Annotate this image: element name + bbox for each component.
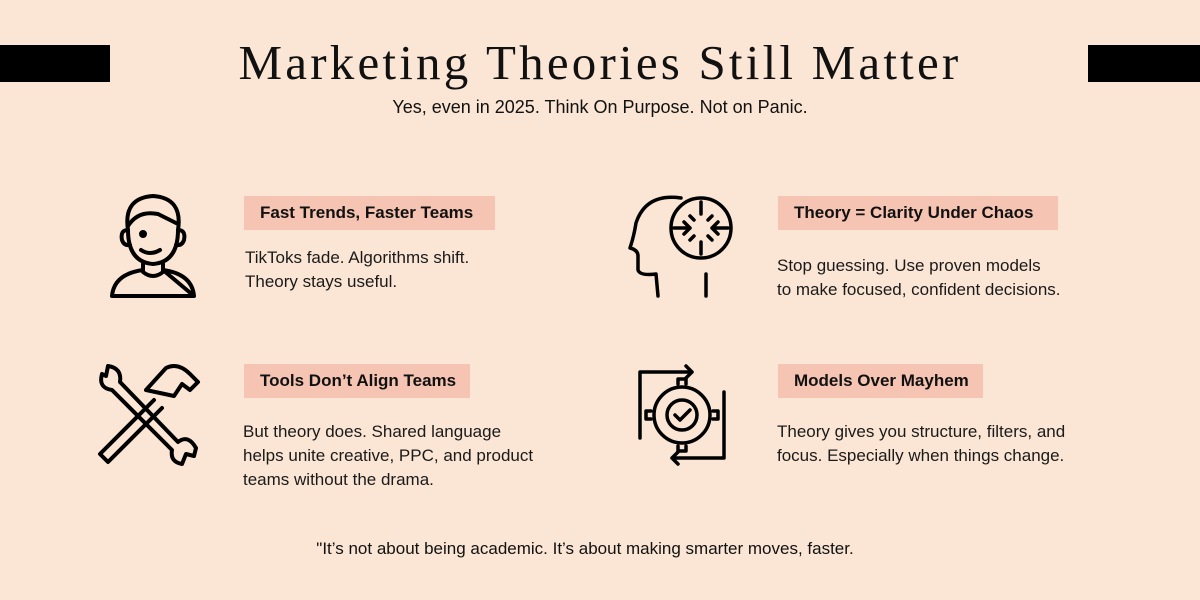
text: theory clarity: to make focused, confident decisions. <box>777 280 1060 299</box>
heading: fast trends: Fast Trends, Faster Teams <box>260 203 473 222</box>
heading: theory clarity: Theory = Clarity Under Chaos <box>794 203 1033 222</box>
text: models <box>777 422 1065 465</box>
quote: "It’s not about being academic. It’s about making smarter moves, faster. <box>316 539 854 558</box>
tape: left black <box>0 45 110 82</box>
heading: tools <box>244 364 470 398</box>
text: tools <box>243 422 533 489</box>
heading: models: Models Over Mayhem <box>794 371 969 390</box>
text: fast trends: Theory stays useful. <box>245 272 397 291</box>
heading: fast trends <box>244 196 495 230</box>
heading: models <box>778 364 983 398</box>
icon: head with arrows <box>628 196 733 298</box>
text: models: focus. Especially when things change. <box>777 446 1064 465</box>
text: theory clarity: Stop guessing. Use proven models <box>777 256 1041 275</box>
text: tools: But theory does. Shared language <box>243 422 501 441</box>
tape: right black <box>1088 45 1200 82</box>
heading: theory clarity <box>778 196 1058 230</box>
icon: wrench and hammer <box>98 364 200 466</box>
title: Marketing Theories Still Matter <box>239 35 961 90</box>
text: theory clarity <box>777 256 1060 299</box>
text: fast trends <box>245 248 469 291</box>
icon: person <box>110 194 196 298</box>
icon: gear with check <box>638 364 726 466</box>
text: tools: helps unite creative, PPC, and product <box>243 446 533 465</box>
text: tools: teams without the drama. <box>243 470 434 489</box>
text: models: Theory gives you structure, filters, and <box>777 422 1065 441</box>
heading: tools: Tools Don’t Align Teams <box>260 371 456 390</box>
text: fast trends: TikToks fade. Algorithms shift. <box>245 248 469 267</box>
subtitle: Yes, even in 2025. Think On Purpose. Not on Panic. <box>392 97 808 117</box>
